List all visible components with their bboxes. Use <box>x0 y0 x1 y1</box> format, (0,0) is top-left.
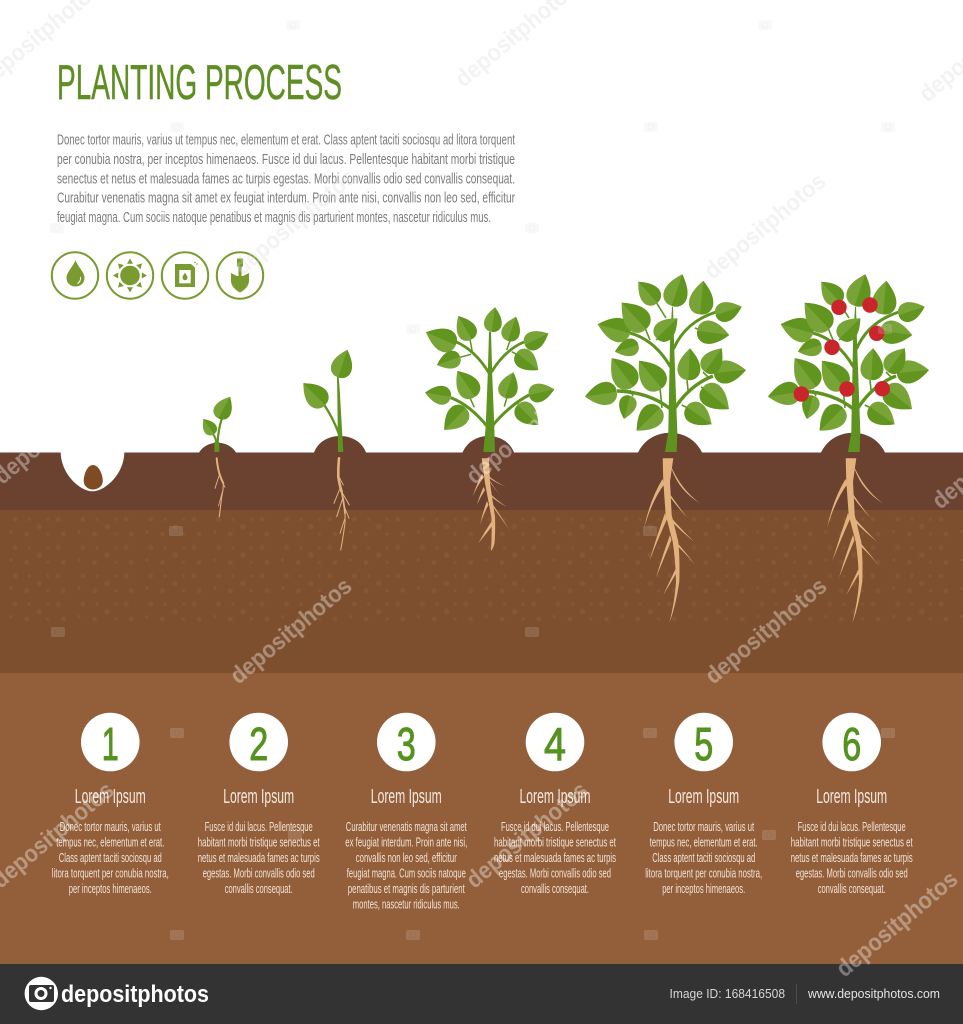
description <box>345 820 467 912</box>
heading: Lorem Ipsum <box>223 786 294 808</box>
leaves <box>421 306 556 438</box>
step 2 <box>198 713 320 896</box>
description: Class aptent taciti sociosqu ad <box>59 851 162 865</box>
watermark overlay: depositphotos <box>229 164 361 281</box>
number badge: 6 <box>842 718 861 770</box>
description: litora torquent per conubia nostra, <box>645 866 762 880</box>
description <box>52 820 169 896</box>
number badge <box>81 713 140 771</box>
number badge <box>377 713 436 771</box>
stage 5 plant <box>583 270 747 623</box>
description: penatibus et magnis dis parturient <box>348 882 465 896</box>
step 6 <box>791 713 913 896</box>
roots <box>215 458 225 517</box>
step 3 <box>345 713 467 912</box>
footer image id: Image ID: 168416508 <box>670 987 785 1001</box>
roots <box>334 458 349 550</box>
stems <box>213 418 222 452</box>
mound <box>462 436 514 452</box>
footer bar <box>0 964 963 1024</box>
number badge <box>526 713 584 771</box>
description: habitant morbi tristique senectus et <box>494 836 616 850</box>
description: convallis consequat. <box>225 882 293 896</box>
description: Class aptent taciti sociosqu ad <box>652 851 755 865</box>
title: PLANTING PROCESS <box>57 56 342 110</box>
description: habitant morbi tristique senectus et <box>198 836 320 850</box>
intro text block: per conubia nostra, per inceptos himenaeos. Fusce id dui lacus. Pellentesque habitant morbi tristique <box>57 152 515 168</box>
icon: shovel <box>217 252 263 299</box>
description: ex feugiat interdum. Proin ante nisi, <box>345 836 467 850</box>
description: tempus nec, elementum et erat. <box>650 836 758 850</box>
mound <box>638 433 702 452</box>
description: netus et malesuada fames ac turpis <box>494 851 616 865</box>
heading: Lorem Ipsum <box>75 786 146 808</box>
seed hole <box>61 452 124 491</box>
watermark overlay: depositphotos <box>225 573 357 690</box>
description: montes, nascetur ridiculus mus. <box>353 898 460 912</box>
description: Fusce id dui lacus. Pellentesque <box>501 820 609 834</box>
icon: water drop <box>52 252 98 299</box>
stems <box>617 302 716 452</box>
number badge: 4 <box>544 718 566 770</box>
intro text block: senectus et netus et malesuada fames ac turpis egestas. Morbi convallis odio sed convallis consequat. <box>57 172 515 188</box>
number badge <box>822 713 881 771</box>
description <box>494 820 616 896</box>
description <box>198 820 320 896</box>
description <box>645 820 762 896</box>
number badge: 1 <box>102 718 119 770</box>
step 4 <box>494 713 616 896</box>
number badge <box>674 713 733 771</box>
intro text block: Curabitur venenatis magna sit amet ex feugiat interdum. Proin ante nisi, convallis non leo sed, efficitur <box>57 190 515 206</box>
number badge: 3 <box>397 718 416 770</box>
soil: mid layer with dots <box>0 510 963 673</box>
leaves <box>198 392 238 438</box>
number badge: 5 <box>694 718 713 770</box>
fruits <box>794 297 890 402</box>
icon: camera <box>25 977 58 1010</box>
step 1 <box>52 713 169 896</box>
footer logo <box>25 977 209 1010</box>
watermark overlay: depositphotos <box>700 573 832 690</box>
watermark overlay: depositphotos <box>699 168 831 285</box>
logo wordmark: depositphotos <box>61 981 209 1008</box>
description: egestas. Morbi convallis odio sed <box>499 866 611 880</box>
leaves <box>295 346 357 413</box>
icon: sun <box>107 252 153 299</box>
description: convallis consequat. <box>818 882 886 896</box>
intro text block: Donec tortor mauris, varius ut tempus nec, elementum et erat. Class aptent taciti sociosqu ad litora torquent <box>57 132 515 148</box>
description: convallis consequat. <box>521 882 589 896</box>
description: per inceptos himenaeos. <box>69 882 152 896</box>
watermark overlay: depositphotos <box>461 373 593 490</box>
plant body <box>766 270 930 623</box>
soil: lower panel <box>0 673 963 964</box>
stage 4 plant <box>421 306 556 551</box>
footer website url: www.depositphotos.com <box>807 987 940 1001</box>
description: per inceptos himenaeos. <box>662 882 745 896</box>
heading: Lorem Ipsum <box>668 786 739 808</box>
intro text block <box>57 132 515 226</box>
heading: Lorem Ipsum <box>816 786 887 808</box>
icon: seed <box>84 465 103 490</box>
stems <box>324 377 343 452</box>
leaves <box>583 270 747 439</box>
description: feugiat magna. Cum sociis natoque <box>347 866 466 880</box>
description: Donec tortor mauris, varius ut <box>653 820 755 834</box>
number badge <box>229 713 288 771</box>
description: netus et malesuada fames ac turpis <box>198 851 320 865</box>
description: litora torquent per conubia nostra, <box>52 866 169 880</box>
soil: dark topsoil band <box>0 452 963 510</box>
icon: fertilizer bag <box>162 252 208 299</box>
watermark overlay: depositphotos <box>461 777 593 894</box>
description: convallis non leo sed, efficitur <box>356 851 457 865</box>
description <box>791 820 913 896</box>
description: Curabitur venenatis magna sit amet <box>346 820 467 834</box>
roots <box>473 458 509 551</box>
mound <box>314 436 366 452</box>
description: Fusce id dui lacus. Pellentesque <box>205 820 313 834</box>
number badge: 2 <box>249 718 268 770</box>
heading: Lorem Ipsum <box>520 786 590 808</box>
roots <box>644 458 700 623</box>
step 5 <box>645 713 762 896</box>
description: tempus nec, elementum et erat. <box>56 836 164 850</box>
description: Donec tortor mauris, varius ut <box>60 820 161 834</box>
heading: Lorem Ipsum <box>371 786 442 808</box>
stage 6 plant with fruit <box>766 270 930 623</box>
stems <box>451 332 529 452</box>
stage 3 plant <box>295 346 366 550</box>
mound <box>199 443 236 452</box>
intro text block: feugiat magna. Cum sociis natoque penatibus et magnis dis parturient montes, nascetur ridiculus mus. <box>57 210 491 226</box>
description: egestas. Morbi convallis odio sed <box>203 866 315 880</box>
stage 2 plant <box>198 392 238 517</box>
